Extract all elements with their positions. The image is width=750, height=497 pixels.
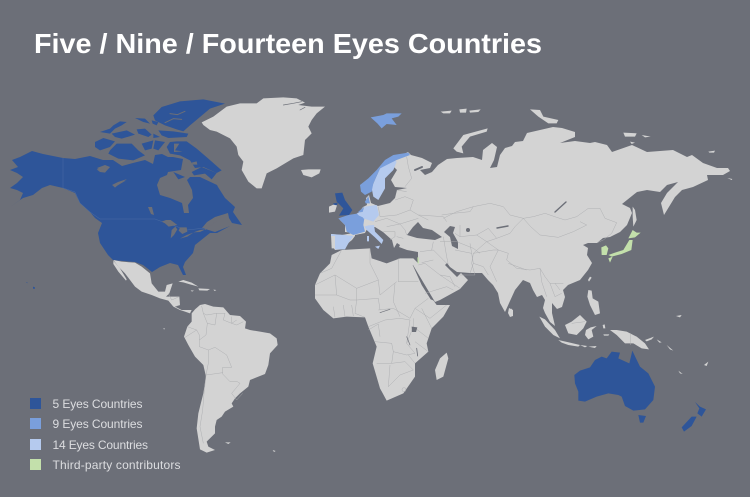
legend item: 5 Eyes: 5 Eyes Countries <box>52 397 142 411</box>
country: Germany <box>362 205 379 222</box>
Arctic islands <box>95 99 225 188</box>
legend item: 14 Eyes: 14 Eyes Countries <box>52 438 148 452</box>
country: Sweden <box>372 160 397 200</box>
country: Norway <box>360 153 410 195</box>
country: Belgium <box>357 212 363 218</box>
country: Ireland <box>329 205 337 213</box>
legend <box>30 397 180 472</box>
South America borders <box>199 306 243 400</box>
Red Sea <box>413 265 434 301</box>
legend item: Third-party: Third-party contributors <box>52 458 180 472</box>
country: France <box>338 213 365 235</box>
map region: Africa <box>315 248 450 401</box>
Canada and USA boundary lines <box>62 158 64 188</box>
map region: Southeast Asia and Melanesia <box>509 290 708 374</box>
country: Portugal <box>331 234 336 248</box>
inland seas <box>407 222 442 240</box>
country: Italy <box>364 225 383 244</box>
country: Japan <box>628 230 641 238</box>
title: Five / Nine / Fourteen Eyes Countries <box>34 28 542 59</box>
map region: Japan and South Korea, third-party contributors <box>601 230 641 263</box>
country: Svalbard <box>371 113 402 128</box>
map region: Mexico, Central America and South America <box>113 260 278 453</box>
world map <box>10 97 732 453</box>
islands at Hawaii <box>26 282 35 289</box>
Great Lakes <box>162 220 218 239</box>
map region: Arctic Russian islands <box>441 109 732 282</box>
Africa borders <box>315 248 378 288</box>
map region: Greenland and Iceland <box>202 97 325 188</box>
country: United Kingdom <box>335 193 352 216</box>
country: Spain <box>331 234 353 249</box>
map region: Europe, 14 Eyes and 9 Eyes countries <box>329 153 410 249</box>
Eurasia borders <box>442 203 617 297</box>
legend item: 9 Eyes: 9 Eyes Countries <box>52 417 142 431</box>
country: Denmark <box>365 196 370 203</box>
country: Netherlands <box>357 207 364 213</box>
map region: Australia and New Zealand, 5 Eyes <box>574 351 706 432</box>
map region: Eurasia <box>331 127 730 326</box>
inland lakes <box>148 207 154 215</box>
country: South Korea <box>601 245 608 255</box>
map region: North America, 5 Eyes (Canada and United States) <box>10 99 242 289</box>
